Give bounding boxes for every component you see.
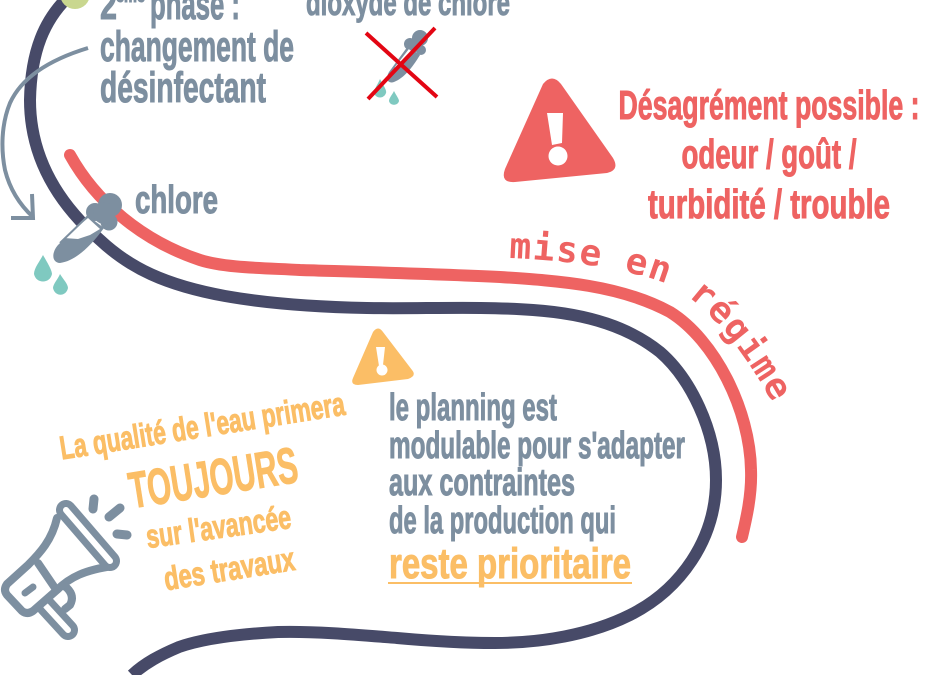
text block: planning: reste prioritaire (389, 540, 631, 588)
text block: planning: aux contraintes (389, 462, 575, 504)
icon: chlorine dropper (34, 193, 122, 295)
curved label: mise en régime: mise en régime (510, 230, 786, 400)
callout: désagrément possible: odeur / goût / (682, 131, 856, 177)
icon: orange warning triangle (352, 328, 414, 385)
rotated message: la qualité de l'eau: TOUJOURS (125, 436, 302, 519)
green phase marker (60, 0, 90, 9)
rotated message: la qualité de l'eau: sur l'avancée (144, 498, 293, 555)
rotated message: la qualité de l'eau: des travaux (161, 540, 298, 597)
arrow from heading to chlore (2, 48, 88, 218)
icon: megaphone (5, 499, 127, 630)
text block: planning: le planning est (389, 387, 557, 429)
rotated message: la qualité de l'eau (57, 385, 348, 597)
icon: red warning triangle (504, 78, 615, 182)
rotated message: la qualité de l'eau: La qualité de l'eau primera (57, 385, 348, 466)
text block: planning (388, 387, 685, 588)
icon: crossed-out dropper (366, 28, 437, 105)
heading: 2ème phase: désinfectant (100, 64, 266, 112)
navy pipeline curve (30, 0, 716, 675)
text block: planning: modulable pour s'adapter (389, 425, 685, 467)
heading: 2ème phase: changement de (100, 23, 294, 71)
callout: désagrément possible (618, 82, 920, 227)
text block: planning: de la production qui (389, 500, 616, 542)
red pipeline curve (70, 155, 751, 537)
label: chlore: chlore (135, 179, 218, 222)
heading: 2ème phase (100, 0, 294, 112)
